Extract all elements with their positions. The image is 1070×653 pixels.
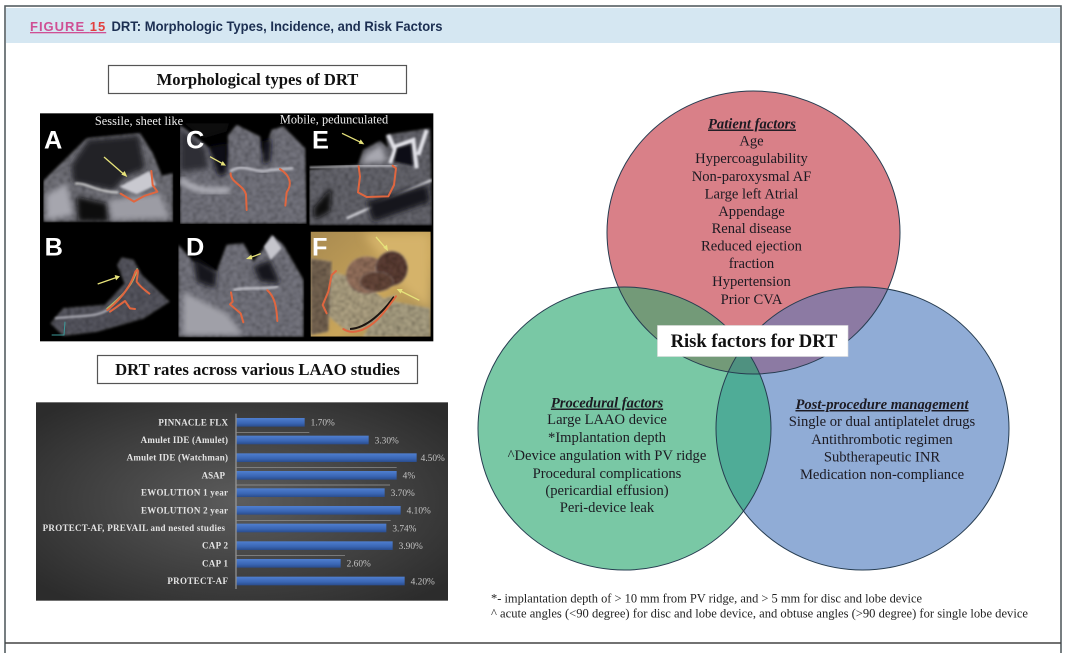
category labels: EWOLUTION 2 year xyxy=(141,505,228,515)
image E: mobile thrombus xyxy=(309,128,432,225)
category labels: Amulet IDE (Amulet) xyxy=(141,435,228,445)
footnotes: *- implantation depth of > 10 mm from PV ridge, and > 5 mm for disc and lobe device xyxy=(491,592,922,606)
text: patient factors: Large left Atrial xyxy=(705,186,798,202)
value labels: 3.30% xyxy=(375,436,399,446)
heading: morphological types: Morphological types of DRT xyxy=(157,70,358,89)
category labels: ASAP xyxy=(202,470,225,480)
category labels: PINNACLE FLX xyxy=(158,417,228,427)
value labels: 4.10% xyxy=(407,507,431,517)
circle outlines xyxy=(478,91,1009,570)
panel: echo image grid xyxy=(40,113,433,341)
text: patient factors: fraction xyxy=(729,256,775,272)
text: procedural factors: Procedural complications xyxy=(533,466,682,482)
text: patient factors: Renal disease xyxy=(712,221,791,237)
text: post-procedure management: Antithrombotic regimen xyxy=(811,432,953,448)
value labels: 3.70% xyxy=(391,489,415,499)
arrow xyxy=(342,133,361,142)
overlap: all three xyxy=(729,356,759,374)
value labels: 3.90% xyxy=(399,542,423,552)
value labels xyxy=(311,419,445,587)
figure number: FIGURE 15 xyxy=(30,19,106,34)
arrow xyxy=(401,291,419,300)
text: procedural factors xyxy=(508,396,706,516)
heading: morphological types xyxy=(108,66,406,94)
text: post-procedure management: Medication non-compliance xyxy=(800,467,964,483)
image C: mobile thrombus xyxy=(180,120,307,223)
text: post-procedure management xyxy=(789,397,976,483)
text: patient factors: Hypercoagulability xyxy=(695,151,809,167)
image D: mobile thrombus xyxy=(178,235,303,337)
text: procedural factors: Peri-device leak xyxy=(560,500,655,516)
heading: DRT rates xyxy=(98,356,418,384)
image F: 3D reconstruction xyxy=(311,232,431,337)
value labels: 4% xyxy=(403,472,415,482)
text: patient factors: Reduced ejection xyxy=(701,238,803,254)
category labels: CAP 2 xyxy=(202,541,228,551)
text: patient factors: Non-paroxysmal AF xyxy=(692,169,811,185)
text: patient factors xyxy=(692,116,811,308)
circle: patient factors xyxy=(607,91,900,374)
circle: post-procedure management xyxy=(716,287,1009,570)
footnotes xyxy=(491,592,1028,620)
text: post-procedure management: Subtherapeutic INR xyxy=(824,450,940,466)
figure title: DRT: Morphologic Types, Incidence, and Risk Factors xyxy=(112,19,442,34)
arrow xyxy=(98,278,116,284)
text: patient factors: Appendage xyxy=(718,204,785,220)
panel letters: E xyxy=(312,126,329,154)
category labels: EWOLUTION 1 year xyxy=(141,488,228,498)
text: patient factors: Hypertension xyxy=(712,274,792,290)
panel letters: C xyxy=(186,126,204,154)
header band xyxy=(6,8,1060,43)
category labels: PROTECT-AF, PREVAIL and nested studies xyxy=(43,523,225,533)
value labels: 1.70% xyxy=(311,419,335,429)
value labels: 3.74% xyxy=(392,524,417,534)
arrow xyxy=(376,237,385,248)
arrow xyxy=(250,254,261,258)
text: patient factors: Patient factors xyxy=(708,116,796,132)
panel letters: F xyxy=(312,234,327,262)
image A: sessile thrombus xyxy=(43,133,173,222)
arrow xyxy=(104,157,124,174)
text: procedural factors: ^Device angulation with PV ridge xyxy=(508,448,706,464)
panel letters: D xyxy=(186,234,204,262)
venn diagram: risk factors xyxy=(478,91,1009,570)
category labels: Amulet IDE (Watchman) xyxy=(127,453,228,463)
text: procedural factors: Large LAAO device xyxy=(547,412,667,428)
text: procedural factors: Procedural factors xyxy=(551,396,663,412)
circle: procedural factors xyxy=(478,287,771,570)
category labels xyxy=(43,417,228,586)
overlap: patient and post-procedure xyxy=(752,288,887,374)
value labels: 4.20% xyxy=(411,577,435,587)
center label: risk factors for DRT xyxy=(658,326,848,356)
center label: risk factors for DRT: Risk factors for DRT xyxy=(671,331,838,352)
overlap: patient and procedural xyxy=(619,288,736,372)
arrow xyxy=(210,157,223,164)
text: post-procedure management: Single or dual antiplatelet drugs xyxy=(789,414,976,430)
text: patient factors: Age xyxy=(739,134,764,150)
category labels: PROTECT-AF xyxy=(167,576,228,586)
text: procedural factors: *Implantation depth xyxy=(548,430,667,446)
text: patient factors: Prior CVA xyxy=(721,292,783,308)
footnotes: ^ acute angles (<90 degree) for disc and lobe device, and obtuse angles (>90 degree) for single lobe device xyxy=(491,606,1028,620)
value labels: 2.60% xyxy=(347,560,371,570)
heading: DRT rates: DRT rates across various LAAO studies xyxy=(115,360,400,379)
bar chart: DRT rates xyxy=(36,402,448,601)
panel letters: B xyxy=(45,234,63,262)
panel letters xyxy=(44,126,329,262)
panel letters: A xyxy=(44,126,62,154)
label: mobile: Mobile, pedunculated xyxy=(280,113,389,127)
bars xyxy=(237,418,417,585)
value labels: 4.50% xyxy=(421,454,445,464)
text: post-procedure management: Post-procedure management xyxy=(795,397,969,413)
overlap: procedural and post-procedure xyxy=(716,372,770,510)
label: sessile: Sessile, sheet like xyxy=(95,114,184,128)
image B: sessile thrombus xyxy=(51,258,169,336)
category labels: CAP 1 xyxy=(202,558,228,568)
text: procedural factors: (pericardial effusion) xyxy=(545,483,669,499)
